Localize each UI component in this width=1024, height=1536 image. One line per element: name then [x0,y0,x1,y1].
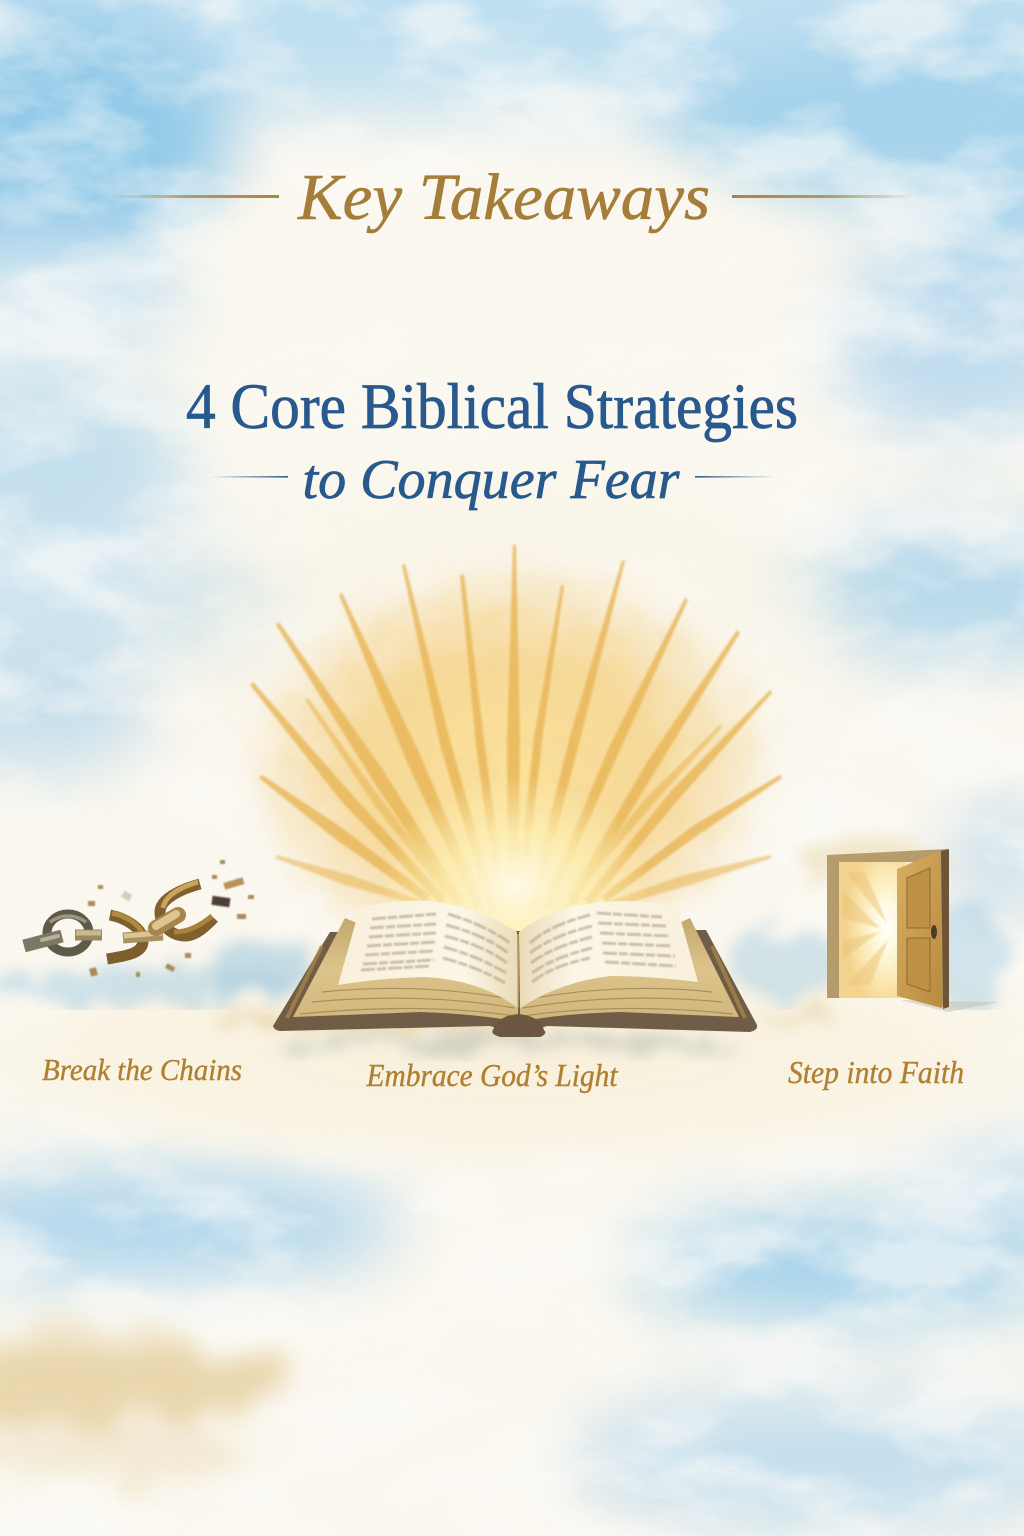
label: Step into Faith: Step into Faith [788,1054,964,1090]
chain link: grey ring [24,914,89,952]
page text lines [361,913,676,983]
door edge [941,849,949,1009]
door frame [827,849,948,1006]
right page [519,901,698,1008]
page block left [293,918,518,1022]
illustration: golden light rays [220,545,820,995]
title: 4 Core Biblical Strategies to Conquer Fear [186,371,798,511]
heading: Key Takeaways [110,161,914,234]
label: Embrace God's Light: Embrace God’s Light [366,1057,619,1093]
open door leaf [897,851,942,1008]
spine [492,1014,545,1037]
title: 4 Core Biblical Strategies to Conquer Fear: to Conquer Fear [302,449,680,511]
label: Break the Chains: Break the Chains [42,1052,242,1087]
door handle [931,925,937,939]
doorway light [839,862,905,998]
title: 4 Core Biblical Strategies to Conquer Fear: 4 Core Biblical Strategies [186,371,798,443]
warm cream wash across the middle [0,920,1024,1180]
shadow under book [230,1012,745,1050]
chain link: broken middle [107,913,163,959]
illustration: open door with light [827,849,1000,1012]
chain link: bar [75,933,102,935]
left page [338,901,518,1008]
book cover [273,930,757,1032]
chain fragments [88,860,254,977]
chain link: broken right [156,882,214,936]
heading: Key Takeaways: Key Takeaways [297,161,710,234]
illustration: broken chain [24,860,254,977]
door panels [907,868,930,992]
door shadow [900,1000,1000,1012]
door light rays [842,872,888,985]
page block right [520,918,739,1022]
illustration: open Bible [230,901,757,1050]
